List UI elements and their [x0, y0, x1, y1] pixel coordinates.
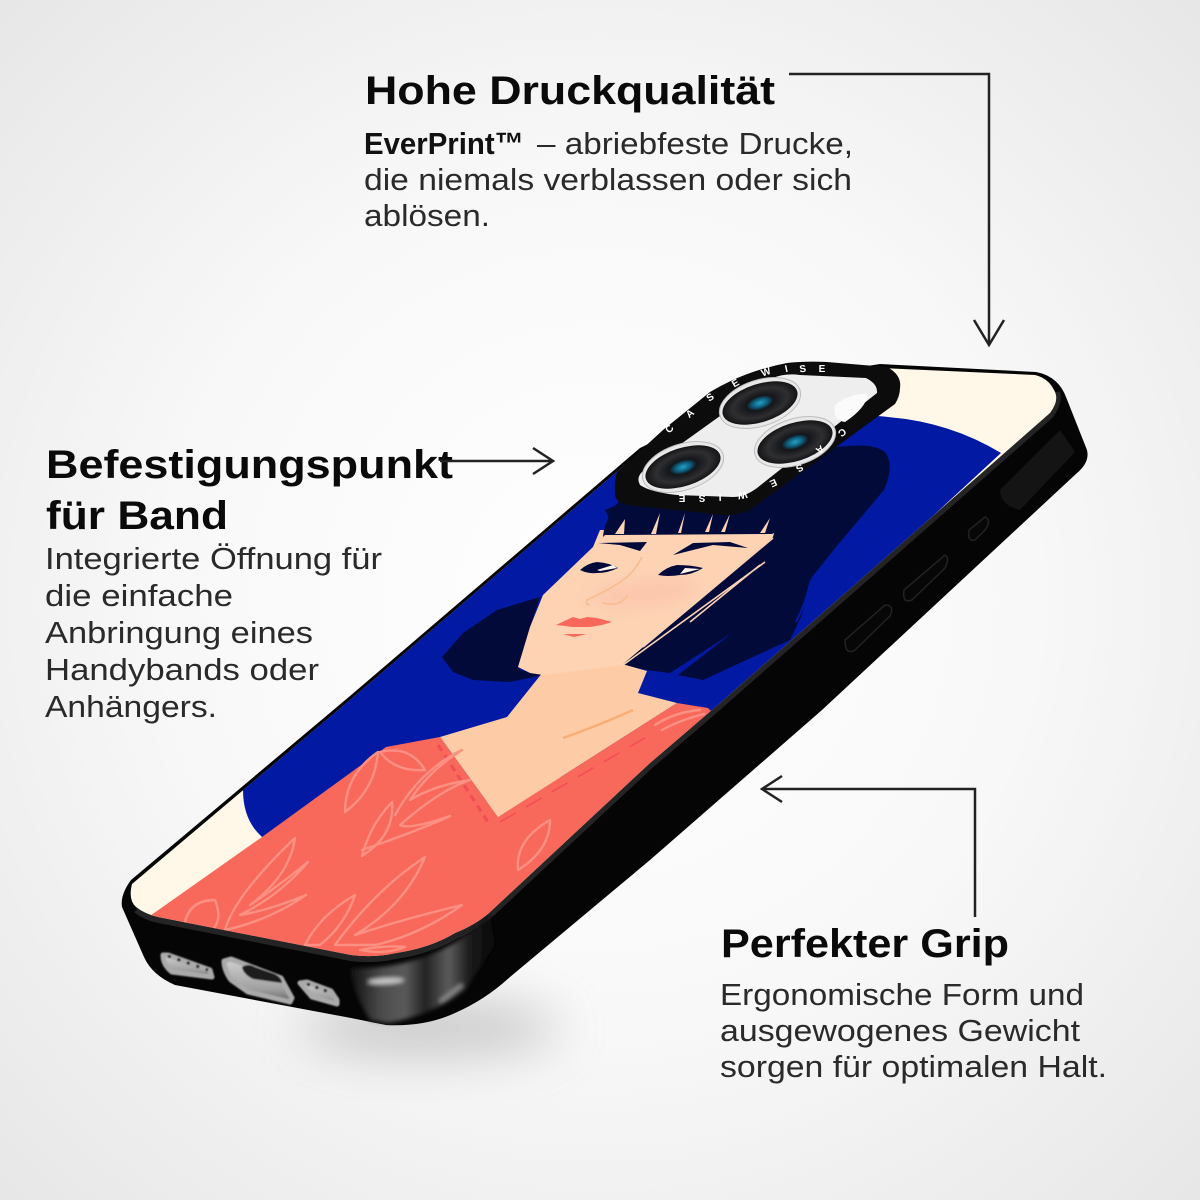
leaf pattern — [185, 710, 704, 952]
heading — [46, 443, 453, 538]
eyebrows — [598, 542, 647, 551]
text block: Befestigungspunkt für Band — [45, 443, 453, 724]
neckline stitches — [438, 745, 488, 822]
neck crease — [563, 710, 633, 738]
phone case — [100, 350, 1100, 1025]
ring brand text: S — [705, 391, 717, 404]
description — [364, 126, 853, 233]
description: Anhängers. — [45, 689, 217, 724]
bumper rim — [136, 392, 1058, 959]
description: Ergonomische Form und — [720, 977, 1084, 1012]
cheek blush — [604, 582, 702, 606]
heading: Befestigungspunkt — [46, 443, 453, 487]
ring brand text: S — [698, 492, 705, 503]
neck — [440, 664, 677, 817]
case body — [122, 364, 1088, 1025]
description: – abriebfeste Drucke, — [537, 126, 853, 161]
ring brand text: A — [684, 408, 697, 421]
ring brand text: C — [835, 425, 848, 438]
hair blue line — [796, 580, 811, 622]
side buttons — [845, 517, 988, 652]
fringe — [603, 502, 775, 537]
nose — [586, 557, 642, 604]
hair back — [605, 445, 890, 680]
lens: left — [636, 432, 730, 502]
hair left bob — [442, 597, 543, 682]
ring brand text: E — [767, 476, 778, 489]
hair strands over face — [623, 538, 773, 665]
ring brand text: E — [678, 492, 685, 503]
ring brand text: E — [730, 377, 742, 390]
camera module — [615, 362, 900, 515]
arrow: strap anchor — [440, 448, 553, 474]
heading: für Band — [46, 494, 228, 538]
printed back art — [130, 368, 1056, 956]
description: sorgen für optimalen Halt. — [720, 1049, 1107, 1084]
phone shadow — [300, 1000, 560, 1056]
ring brand text: W — [760, 366, 773, 379]
arrow: grip — [762, 776, 975, 917]
description: ablösen. — [364, 198, 490, 233]
text block: Perfekter Grip — [720, 922, 1107, 1084]
description: Integrierte Öffnung für — [45, 541, 382, 576]
ring brand text: I — [784, 364, 789, 375]
ring brand text: W — [736, 488, 748, 501]
arrow: print quality — [789, 74, 1004, 345]
camera plate — [638, 374, 877, 497]
ring brand text: S — [793, 461, 805, 474]
camera ring — [615, 362, 900, 515]
eyes — [580, 562, 618, 573]
description: ausgewogenes Gewicht — [720, 1013, 1080, 1048]
description — [45, 541, 382, 724]
lens: right — [748, 407, 842, 477]
description: Handybands oder — [45, 652, 319, 687]
side texture — [1000, 430, 1075, 510]
speaker right — [300, 982, 337, 1004]
heading: Hohe Druckqualität — [365, 69, 775, 113]
lips — [556, 617, 612, 627]
text block: Hohe Druckqualität — [364, 69, 853, 233]
shirt — [151, 703, 711, 956]
ring brand text: A — [813, 442, 826, 456]
description: die einfache — [45, 578, 233, 613]
description — [720, 977, 1107, 1084]
lens: top — [713, 368, 807, 438]
description: die niemals verblassen oder sich — [364, 162, 852, 197]
ring brand text: C — [664, 423, 677, 436]
bottom ports — [163, 955, 337, 1004]
charging port — [224, 959, 292, 1002]
description: Anbringung eines — [45, 615, 313, 650]
ring brand text: S — [799, 364, 807, 375]
ring brand text: E — [819, 364, 826, 375]
ring brand text: I — [718, 491, 722, 502]
heading: Perfekter Grip — [721, 922, 1009, 966]
description: EverPrint™ — [364, 126, 524, 161]
corner highlight — [350, 915, 495, 1023]
ring brand text — [664, 364, 848, 503]
face — [518, 530, 775, 675]
fringe notches — [615, 513, 770, 534]
speaker left — [163, 955, 212, 977]
blue circle — [243, 416, 1001, 837]
